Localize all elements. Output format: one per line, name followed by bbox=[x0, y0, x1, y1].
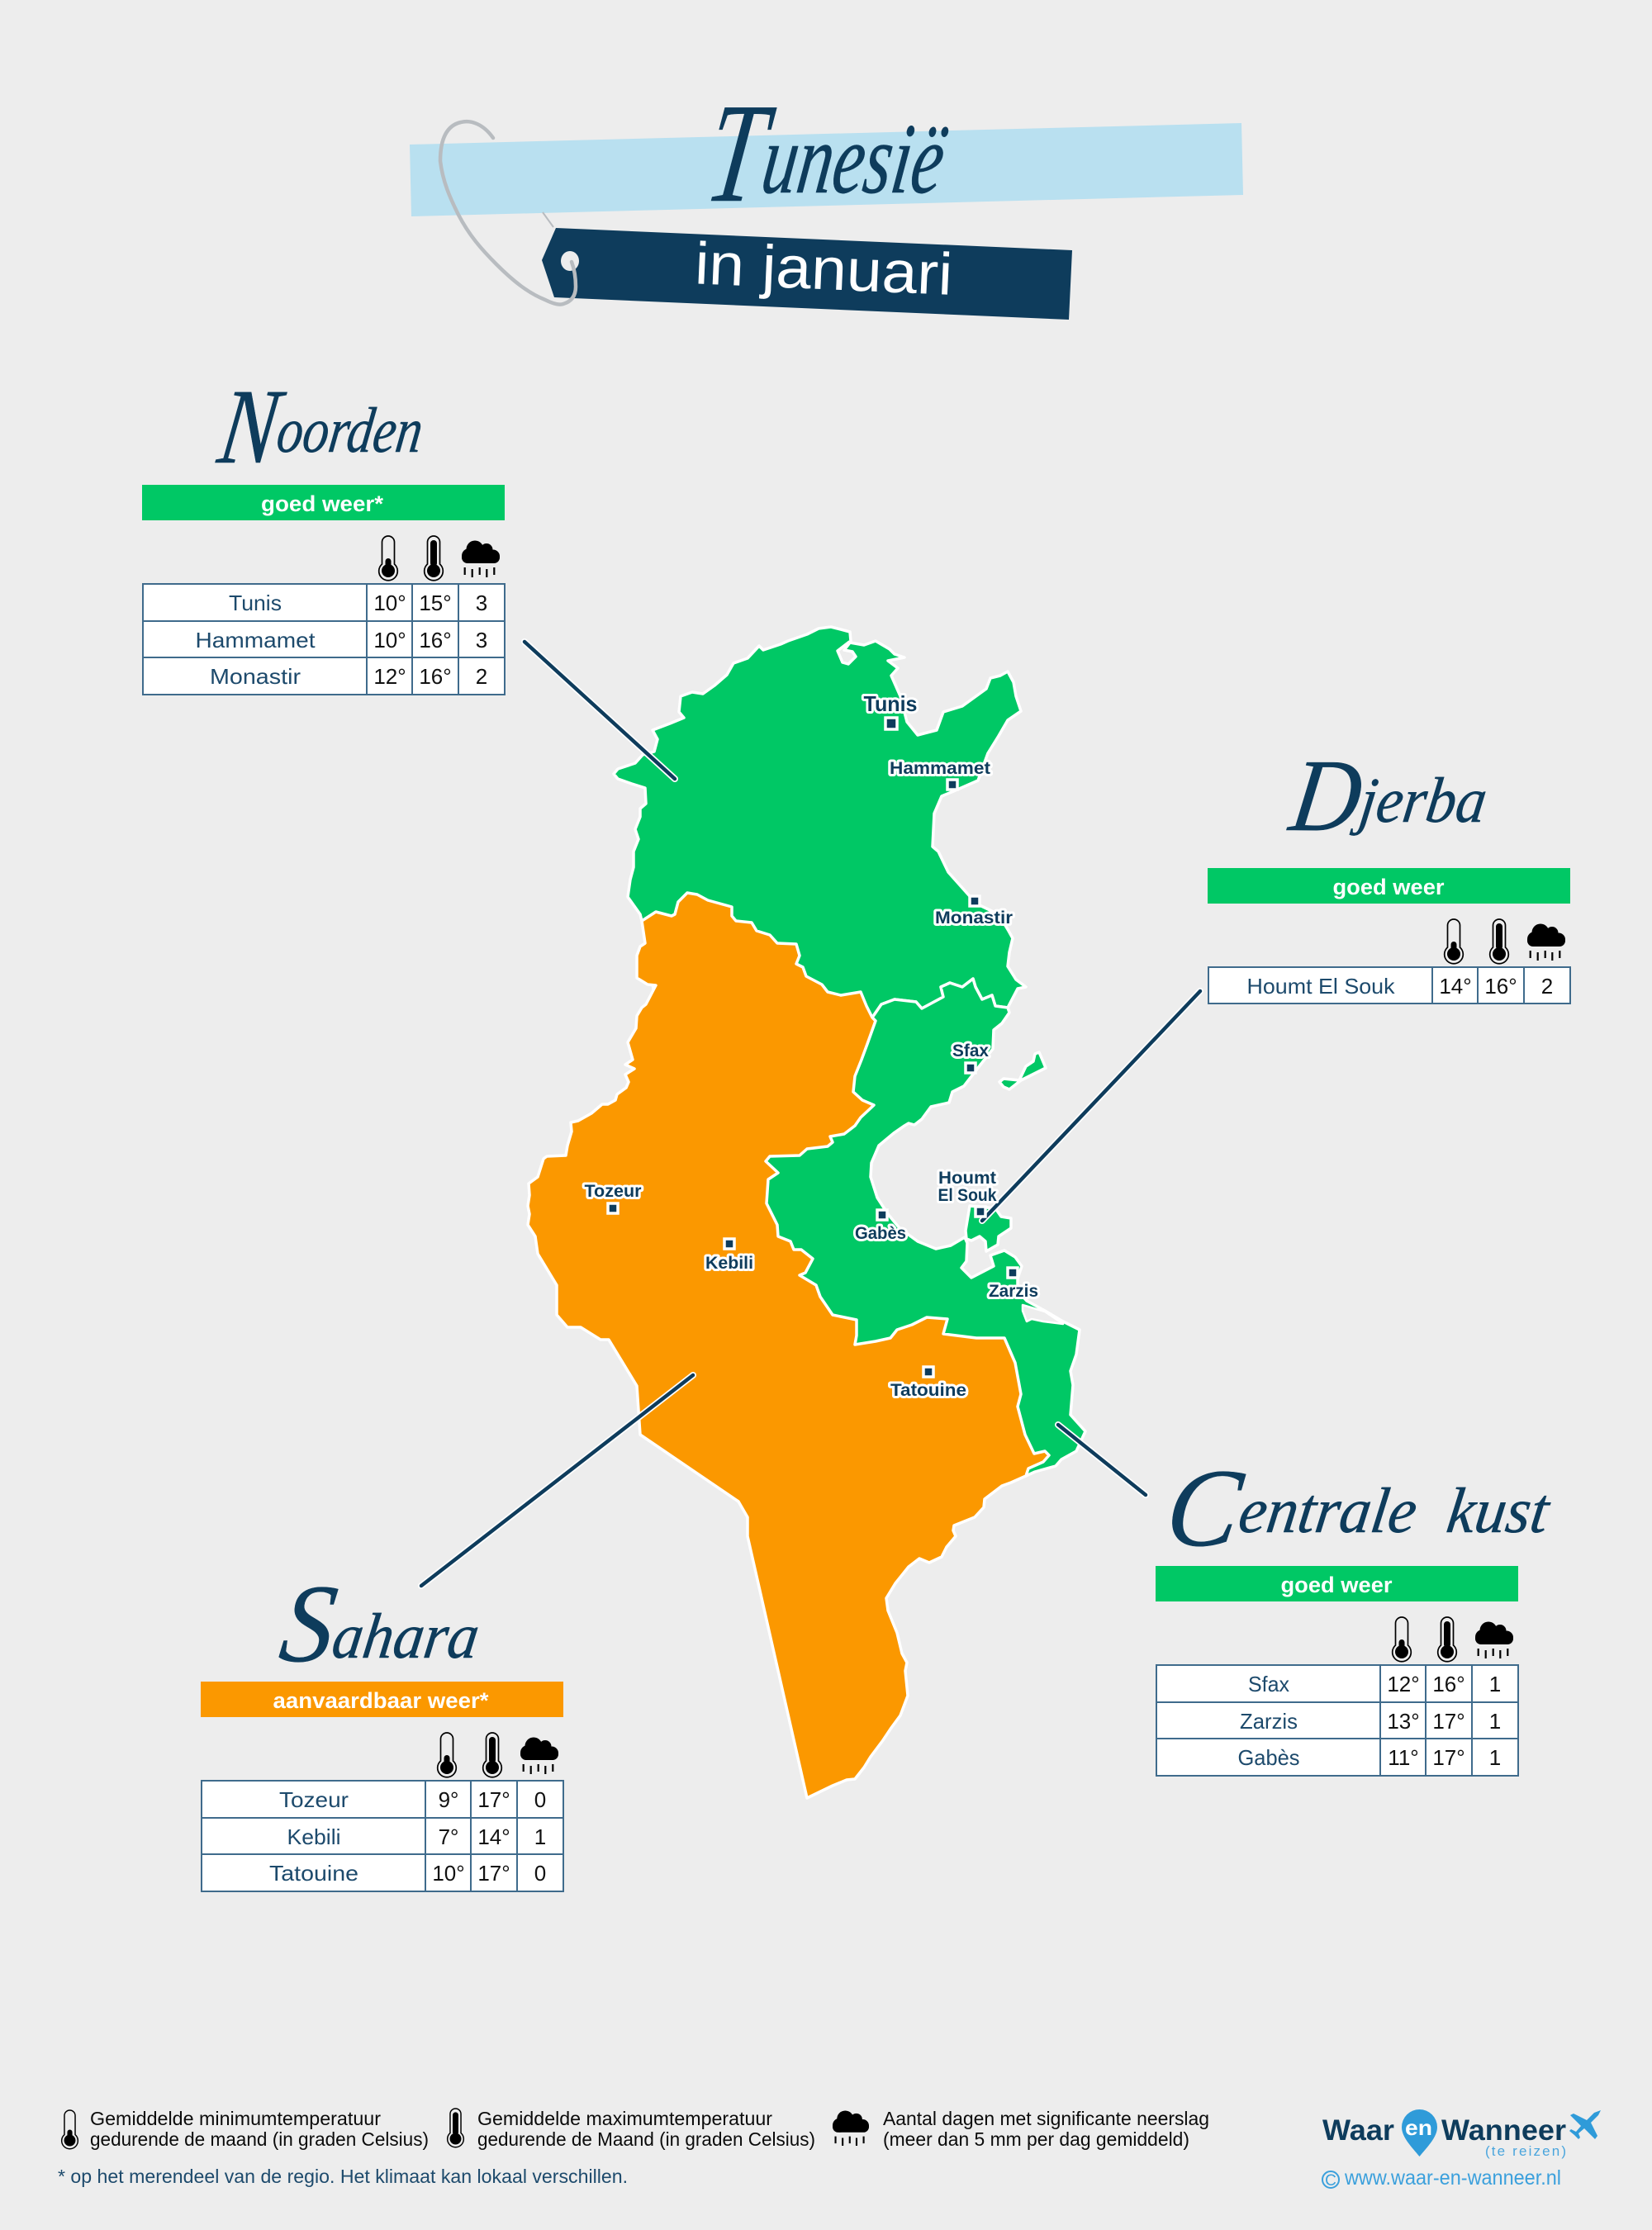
website address: www.waar-en-wanneer.nl bbox=[1344, 2166, 1561, 2190]
climate table: Tozeur bbox=[279, 1787, 349, 1812]
climate table: 10° bbox=[432, 1861, 465, 1886]
city: Tozeur: Tozeur bbox=[585, 1182, 641, 1201]
climate table: Tatouine bbox=[269, 1861, 358, 1886]
climate table: Kebili bbox=[287, 1824, 340, 1849]
rating bar: goed weer bbox=[1280, 1573, 1393, 1597]
climate table: 17° bbox=[1432, 1745, 1465, 1770]
climate table: 3 bbox=[476, 591, 487, 615]
climate table: Gabès bbox=[1237, 1745, 1300, 1770]
legend: maximum temperature bbox=[448, 2108, 815, 2150]
climate table: 12° bbox=[1387, 1672, 1420, 1696]
climate table: 14° bbox=[1439, 974, 1472, 999]
city: Sfax bbox=[952, 1041, 989, 1073]
city: Hammamet: Hammamet bbox=[890, 759, 990, 778]
climate table: 17° bbox=[1432, 1709, 1465, 1734]
climate table: 9° bbox=[439, 1787, 458, 1812]
panel: Djerba bbox=[1208, 739, 1570, 1004]
legend: minimum temperature bbox=[62, 2108, 429, 2150]
copyright symbol bbox=[1322, 2171, 1339, 2190]
rating bar bbox=[1208, 868, 1570, 904]
panel: Sahara bbox=[201, 1563, 563, 1891]
climate table: 3 bbox=[476, 628, 487, 652]
rating bar: goed weer bbox=[1333, 875, 1445, 899]
island: Kerkennah (green) bbox=[999, 1052, 1046, 1089]
leader lines bbox=[421, 642, 1200, 1586]
title banner bbox=[410, 75, 1243, 320]
climate table: 17° bbox=[477, 1787, 510, 1812]
legend: precipitation: (meer dan 5 mm per dag gemiddeld) bbox=[883, 2128, 1189, 2150]
climate table: 16° bbox=[1484, 974, 1517, 999]
city: Tatouine: Tatouine bbox=[890, 1381, 966, 1400]
city: Gabès bbox=[855, 1210, 906, 1243]
climate table: 12° bbox=[373, 664, 406, 689]
rating bar bbox=[201, 1682, 563, 1717]
climate table: 10° bbox=[373, 628, 406, 652]
region: Sahara (orange) bbox=[528, 893, 1049, 1798]
city: Zarzis: Zarzis bbox=[989, 1282, 1038, 1301]
column icons bbox=[438, 1733, 558, 1777]
column icons bbox=[379, 536, 500, 581]
panel: Noorden bbox=[142, 368, 505, 695]
climate table: 16° bbox=[419, 664, 452, 689]
climate table: 15° bbox=[419, 591, 452, 615]
heading: Sahara: S bbox=[273, 1563, 344, 1686]
subtitle tag bbox=[542, 228, 1072, 320]
climate table: 0 bbox=[534, 1787, 546, 1812]
rating bar bbox=[142, 485, 505, 520]
logo: Waar en Wanneer bbox=[1322, 2109, 1601, 2190]
logo word: Wanneer: Wanneer bbox=[1441, 2114, 1566, 2147]
city: Monastir: Monastir bbox=[935, 909, 1013, 928]
climate table: 2 bbox=[476, 664, 487, 689]
subtitle: in januari: in januari bbox=[694, 230, 954, 308]
city: Monastir bbox=[935, 896, 1013, 928]
legend: precipitation bbox=[833, 2108, 1209, 2150]
legend bbox=[62, 2108, 1209, 2150]
icon: map pin bbox=[1402, 2109, 1437, 2156]
legend: minimum temperature: Gemiddelde minimumtemperatuur bbox=[90, 2108, 381, 2129]
light blue title band bbox=[410, 123, 1243, 216]
climate table bbox=[1156, 1665, 1518, 1776]
tag hole bbox=[561, 251, 579, 271]
climate table: 13° bbox=[1387, 1709, 1420, 1734]
map of Tunisia bbox=[421, 627, 1200, 1798]
rating bar: goed weer* bbox=[261, 491, 384, 516]
legend: precipitation: Aantal dagen met significante neerslag bbox=[883, 2108, 1209, 2129]
climate table: Tunis bbox=[229, 591, 282, 615]
city: Tunis bbox=[864, 691, 917, 729]
heading: Noorden: N bbox=[211, 368, 291, 486]
climate table: 2 bbox=[1541, 974, 1553, 999]
city: Hammamet bbox=[890, 759, 990, 790]
city: Zarzis bbox=[989, 1268, 1038, 1301]
climate table: 17° bbox=[477, 1861, 510, 1886]
climate table: Sfax bbox=[1248, 1672, 1289, 1696]
city: Kebili: Kebili bbox=[705, 1254, 753, 1273]
city: Kebili bbox=[705, 1239, 753, 1273]
city: Tatouine bbox=[890, 1367, 966, 1400]
climate table: 10° bbox=[373, 591, 406, 615]
climate table: Monastir bbox=[210, 664, 301, 689]
island: Djerba (green) bbox=[966, 1206, 1011, 1251]
lagoon: El Biban bbox=[1023, 1305, 1063, 1324]
climate table: 0 bbox=[534, 1861, 546, 1886]
climate table bbox=[202, 1781, 563, 1891]
logo word: en: en bbox=[1405, 2115, 1432, 2140]
heading: Djerba: jerba bbox=[1349, 764, 1492, 836]
logo word: Waar: Waar bbox=[1322, 2114, 1394, 2147]
climate table: Houmt El Souk bbox=[1247, 974, 1396, 999]
climate table: 1 bbox=[534, 1824, 546, 1849]
climate table: 1 bbox=[1489, 1709, 1501, 1734]
heading: Centrale kust: C bbox=[1160, 1447, 1250, 1570]
heading: Noorden: oorden bbox=[273, 394, 428, 466]
legend: maximum temperature: gedurende de Maand (in graden Celsius) bbox=[477, 2128, 815, 2150]
city: Tozeur bbox=[585, 1182, 641, 1213]
city: Houmt El Souk: Houmt bbox=[938, 1169, 996, 1188]
tag cord bbox=[440, 121, 576, 305]
climate table bbox=[1208, 967, 1570, 1004]
column icons bbox=[1393, 1617, 1513, 1662]
climate table: 16° bbox=[419, 628, 452, 652]
region: Noorden (green) bbox=[614, 627, 1026, 1074]
climate table: 11° bbox=[1388, 1745, 1419, 1770]
climate table: Zarzis bbox=[1240, 1709, 1298, 1734]
legend: minimum temperature: gedurende de maand (in graden Celsius) bbox=[90, 2128, 429, 2150]
copyright symbol: C bbox=[1325, 2172, 1336, 2190]
title: Tunesië: T bbox=[698, 75, 781, 232]
heading: Sahara: ahara bbox=[328, 1600, 484, 1672]
climate table: 7° bbox=[439, 1824, 458, 1849]
logo tagline: (te reizen) bbox=[1485, 2143, 1566, 2159]
climate table: 14° bbox=[477, 1824, 510, 1849]
heading: Djerba: D bbox=[1283, 739, 1370, 853]
rating bar bbox=[1156, 1566, 1518, 1601]
region: Centrale kust (green) bbox=[743, 979, 1085, 1476]
city: Houmt El Souk bbox=[938, 1169, 997, 1217]
icon: airplane bbox=[1569, 2110, 1601, 2139]
city: Gabès: Gabès bbox=[855, 1224, 906, 1243]
footnote: * op het merendeel van de regio. Het klimaat kan lokaal verschillen. bbox=[58, 2166, 628, 2187]
panel: Centrale kust bbox=[1156, 1447, 1559, 1776]
city: Houmt El Souk: El Souk bbox=[938, 1186, 997, 1205]
climate table: 1 bbox=[1489, 1745, 1501, 1770]
city: Tunis: Tunis bbox=[864, 691, 917, 716]
climate table: 16° bbox=[1432, 1672, 1465, 1696]
column icons bbox=[1445, 919, 1565, 964]
climate table bbox=[143, 584, 505, 695]
rating bar: aanvaardbaar weer* bbox=[273, 1688, 489, 1713]
climate table: Hammamet bbox=[195, 628, 316, 652]
heading: Centrale kust: entrale kust bbox=[1235, 1474, 1555, 1546]
climate table: 1 bbox=[1489, 1672, 1501, 1696]
title: Tunesië: unesië bbox=[756, 103, 952, 215]
city: Sfax: Sfax bbox=[952, 1041, 989, 1060]
legend: maximum temperature: Gemiddelde maximumtemperatuur bbox=[477, 2108, 772, 2129]
